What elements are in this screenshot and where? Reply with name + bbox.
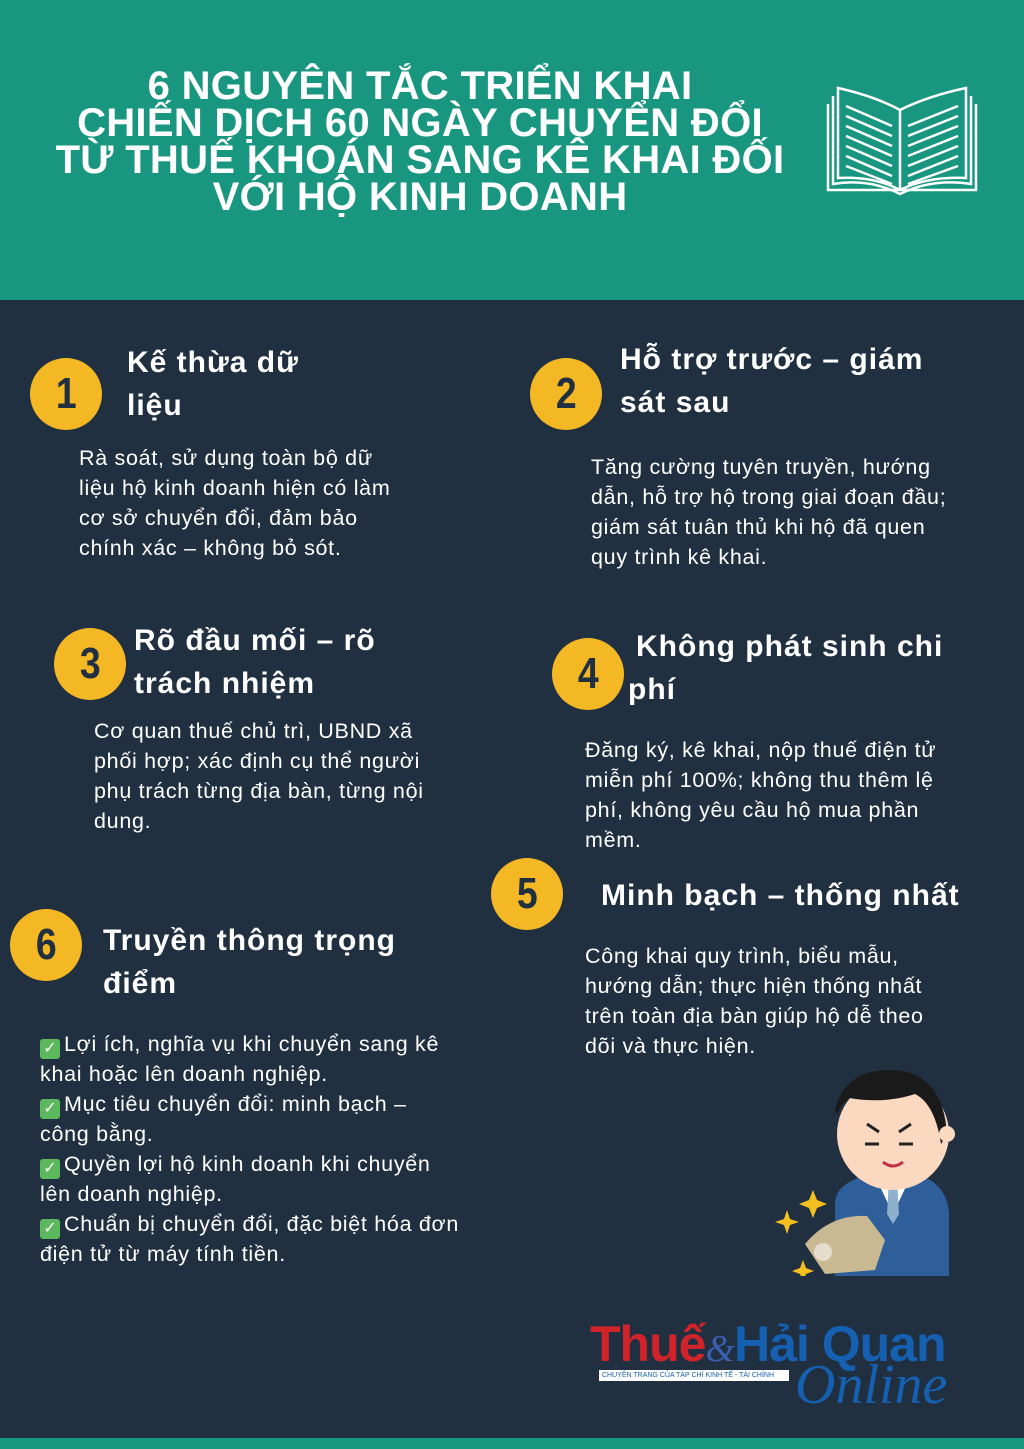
icon: number 4 [552, 638, 624, 710]
heading 4 [628, 630, 943, 706]
text 6: checklist: Lợi ích, nghĩa vụ khi chuyển sang kê [64, 1032, 439, 1056]
heading 3: trách nhiệm [134, 667, 315, 700]
text 3: phối hợp; xác định cụ thể người [94, 749, 420, 773]
icon: number 2 [530, 358, 602, 430]
text 6: checklist: ✓ [43, 1040, 57, 1057]
panel: principle 1 [30, 346, 390, 560]
heading 4: Không phát sinh chi [636, 630, 943, 663]
text 1 [79, 446, 390, 560]
heading 2 [620, 342, 923, 419]
heading 6 [103, 924, 396, 1000]
icon: number 5 [491, 858, 563, 930]
text 2 [591, 455, 946, 569]
heading 2: Hỗ trợ trước – giám [620, 343, 923, 376]
icon: number 2: 2 [556, 369, 576, 418]
text 6: checklist: khai hoặc lên doanh nghiệp. [40, 1062, 328, 1086]
logo: Thuế & Hải Quan Online: Thuế&Hải Quan [590, 1316, 945, 1372]
text 1: liệu hộ kinh doanh hiện có làm [79, 476, 390, 500]
header band [0, 0, 1024, 300]
heading 2: sát sau [620, 386, 730, 419]
icon: number 1: 1 [56, 369, 76, 418]
icon: open book [826, 86, 978, 196]
text 4: mềm. [585, 828, 642, 852]
heading 3: Rõ đầu mối – rõ [134, 624, 376, 657]
title: TỪ THUẾ KHOÁN SANG KÊ KHAI ĐỐI [56, 138, 784, 182]
text 6: checklist: lên doanh nghiệp. [40, 1182, 223, 1206]
text 4: phí, không yêu cầu hộ mua phần [585, 798, 919, 822]
text 6: checklist: Chuẩn bị chuyển đổi, đặc biệt hóa đơn [64, 1212, 459, 1236]
text 4 [585, 738, 936, 852]
title [56, 63, 784, 219]
illustration: businessman with money [775, 1070, 955, 1276]
text 5: trên toàn địa bàn giúp hộ dễ theo [585, 1004, 924, 1028]
text 6: checklist: công bằng. [40, 1122, 153, 1146]
text 2: quy trình kê khai. [591, 545, 767, 569]
text 5 [585, 944, 924, 1058]
heading 5: Minh bạch – thống nhất [601, 879, 960, 912]
text 3: Cơ quan thuế chủ trì, UBND xã [94, 719, 413, 743]
text 1: Rà soát, sử dụng toàn bộ dữ [79, 446, 373, 470]
text 5: Công khai quy trình, biểu mẫu, [585, 944, 899, 968]
text 3: phụ trách từng địa bàn, từng nội [94, 779, 424, 803]
heading 6: Truyền thông trọng [103, 924, 396, 957]
text 3: dung. [94, 809, 151, 833]
heading 1: Kế thừa dữ [127, 346, 299, 379]
text 5: dõi và thực hiện. [585, 1034, 756, 1058]
logo: Thuế & Hải Quan Online: Online [795, 1354, 947, 1416]
text 4: miễn phí 100%; không thu thêm lệ [585, 768, 934, 792]
text 4: Đăng ký, kê khai, nộp thuế điện tử [585, 738, 936, 762]
panel: principle 2 [530, 342, 946, 569]
panel: principle 3 [54, 624, 424, 833]
heading 3 [134, 624, 376, 700]
icon: number 3: 3 [80, 639, 100, 688]
title: 6 NGUYÊN TẮC TRIỂN KHAI [148, 64, 692, 108]
icon: number 5: 5 [517, 869, 537, 918]
panel: principle 5 [491, 858, 960, 1058]
text 6: checklist: Mục tiêu chuyển đổi: minh bạch – [64, 1092, 407, 1116]
footer band [0, 1438, 1024, 1449]
icon: number 6: 6 [36, 920, 56, 969]
logo: Thuế & Hải Quan Online: CHUYÊN TRANG CỦA TẠP CHÍ KINH TẾ - TÀI CHÍNH [602, 1372, 774, 1379]
text 6: checklist: Quyền lợi hộ kinh doanh khi chuyển [64, 1152, 431, 1176]
panel: principle 6 [10, 909, 459, 1266]
text 2: dẫn, hỗ trợ hộ trong giai đoạn đầu; [591, 485, 946, 509]
title: VỚI HỘ KINH DOANH [213, 175, 627, 219]
text 6: checklist: ✓ [43, 1100, 57, 1117]
text 1: chính xác – không bỏ sót. [79, 536, 342, 560]
text 6: checklist: ✓ [43, 1160, 57, 1177]
text 5: hướng dẫn; thực hiện thống nhất [585, 974, 922, 998]
heading 4: phí [628, 673, 676, 706]
icon: number 3 [54, 628, 126, 700]
heading 1: liệu [127, 389, 183, 422]
panel: principle 4 [552, 630, 943, 852]
icon: number 1 [30, 358, 102, 430]
logo: Thuế & Hải Quan Online [590, 1316, 947, 1416]
text 2: giám sát tuân thủ khi hộ đã quen [591, 515, 925, 539]
icon: number 6 [10, 909, 82, 981]
text 6: checklist: ✓ [43, 1220, 57, 1237]
text 6: checklist [40, 1032, 459, 1266]
icon: number 4: 4 [578, 649, 598, 698]
text 6: checklist: điện tử từ máy tính tiền. [40, 1242, 286, 1266]
text 2: Tăng cường tuyên truyền, hướng [591, 455, 931, 479]
text 3 [94, 719, 424, 833]
text 1: cơ sở chuyển đổi, đảm bảo [79, 506, 358, 530]
heading 6: điểm [103, 967, 177, 1000]
heading 1 [127, 346, 299, 422]
title: CHIẾN DỊCH 60 NGÀY CHUYỂN ĐỔI [77, 101, 763, 145]
